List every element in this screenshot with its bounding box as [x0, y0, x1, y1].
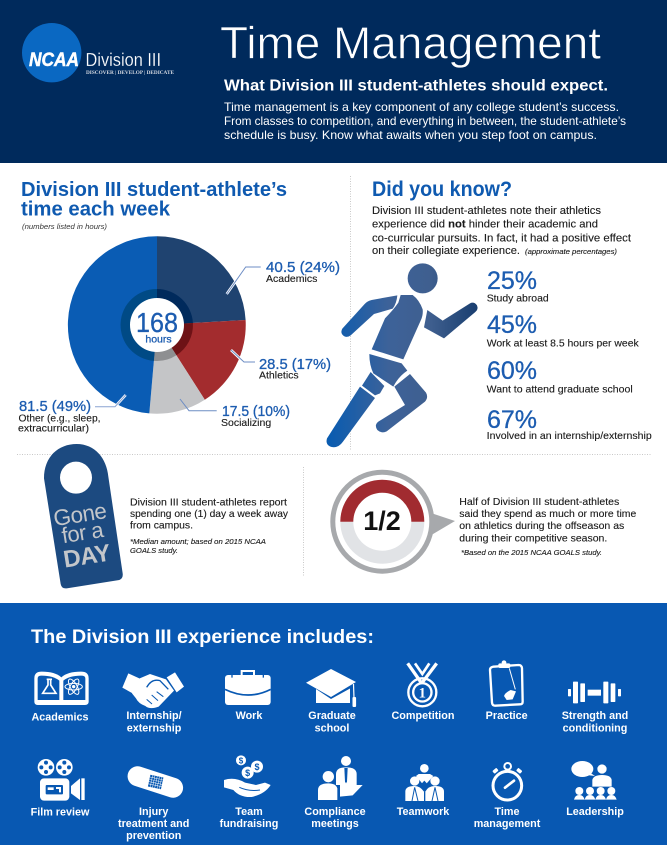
icon: fundraising hand [224, 755, 271, 797]
stat: study abroad: 25% [487, 267, 537, 295]
stat: graduate school [487, 357, 633, 396]
one half text [459, 496, 636, 557]
icon: medal [408, 663, 437, 706]
gone for a day text: GOALS study. [130, 548, 178, 555]
label: other [18, 398, 100, 434]
label: academics: Academics [31, 712, 89, 724]
label: other: extracurricular) [18, 422, 89, 434]
intro text [224, 100, 626, 142]
did you know text: experience did not hinder their academic and [372, 218, 598, 230]
stat: study abroad [487, 267, 549, 304]
stat: graduate school: Want to attend graduate school [487, 384, 633, 396]
panel: experience [0, 603, 667, 845]
label: time management [474, 806, 541, 830]
label: academics [266, 259, 340, 285]
centre total: 168 [136, 307, 178, 338]
intro text: schedule is busy. Know what awaits when you step foot on campus. [224, 128, 597, 142]
label: graduate school [308, 710, 356, 734]
icon: film camera [38, 759, 85, 801]
stat: internship [487, 406, 652, 442]
dotted dividers [17, 176, 652, 576]
label: other: 81.5 (49%) [19, 398, 91, 415]
label: socializing [221, 403, 290, 429]
label: socializing: Socializing [221, 417, 271, 429]
heading: did you know: Did you know? [372, 178, 512, 201]
label: fundraising: fundraising [220, 818, 278, 830]
stat: work [487, 311, 639, 350]
stat: work: 45% [487, 311, 537, 339]
gone for a day text: Division III student-athletes report [130, 496, 287, 508]
stat: internship: Involved in an internship/externship [487, 430, 652, 442]
label: practice: Practice [486, 710, 528, 722]
label: compliance: meetings [311, 818, 359, 830]
leader lines [95, 267, 261, 411]
icon: door hanger [44, 444, 123, 588]
label: strength: Strength and [562, 710, 628, 722]
NCAA Division III logo: DISCOVER | DEVELOP | DEDICATE [86, 71, 174, 76]
did you know text: co-curricular pursuits. In fact, it had a positive effect [372, 232, 631, 244]
label: athletics: Athletics [259, 370, 299, 382]
icon: clipboard with whistle [490, 660, 523, 706]
label: time management: Time [494, 806, 520, 818]
one half text: during their competitive season. [459, 532, 607, 544]
label: athletics: 28.5 (17%) [259, 356, 331, 373]
label: time management: management [474, 818, 541, 830]
label: internship: Internship/ [126, 710, 182, 722]
title: Time Management [220, 18, 601, 68]
did you know text [372, 205, 631, 257]
label: teamwork: Teamwork [397, 806, 450, 818]
heading: weekly time: Division III student-athlete’s [21, 178, 287, 201]
icon: handshake [122, 672, 184, 708]
icon: academics [34, 672, 89, 705]
intro text: From classes to competition, and everything in between, the student-athlete’s [224, 114, 626, 128]
stat: study abroad: Study abroad [487, 292, 549, 304]
icon: runner [327, 263, 478, 447]
intro text: Time management is a key component of any college student’s success. [224, 100, 619, 114]
gone for a day text: from campus. [130, 520, 193, 532]
icon: leadership [571, 761, 617, 800]
icon: door hanger: for a [60, 517, 106, 548]
label: competition: Competition [392, 710, 454, 722]
NCAA Division III logo: Division III [86, 49, 161, 70]
label: socializing: 17.5 (10%) [222, 403, 290, 420]
header band [0, 0, 667, 163]
heading: weekly time [21, 178, 287, 221]
label: injury: prevention [126, 830, 181, 842]
stat: graduate school: 60% [487, 357, 537, 385]
label: fundraising [220, 806, 278, 830]
subtitle: What Division III student-athletes should expect. [224, 78, 608, 95]
label: strength: conditioning [563, 722, 627, 734]
one half text: said they spend as much or more time [459, 508, 636, 520]
label: strength [562, 710, 628, 734]
one half graphic: 1/2 [363, 506, 401, 536]
did you know text: on their collegiate experience. [372, 245, 520, 257]
gone for a day text: *Median amount; based on 2015 NCAA [130, 539, 266, 546]
icon: stopwatch [492, 763, 522, 800]
stat: internship: 67% [487, 406, 537, 434]
heading: weekly time: time each week [21, 198, 171, 221]
NCAA Division III logo [22, 23, 174, 82]
label: injury: Injury [139, 806, 168, 818]
icon: medal: 1 [419, 686, 426, 702]
label: injury: treatment and [118, 818, 189, 830]
did you know text: (approximate percentages) [525, 247, 617, 256]
icon: graduation cap [306, 669, 356, 707]
icon: door hanger: Gone [52, 498, 108, 531]
label: internship: externship [127, 722, 182, 734]
icon: door hanger: DAY [62, 540, 113, 574]
one half graphic [333, 472, 455, 571]
label: academics: Academics [266, 273, 317, 285]
centre total: hours [145, 334, 172, 346]
icon: fundraising hand: $ [254, 762, 259, 772]
icon: teamwork [405, 764, 444, 801]
one half text: Half of Division III student-athletes [459, 496, 619, 508]
icon: fundraising hand: $ [245, 768, 250, 778]
icon: bandage [125, 764, 186, 800]
one half text: *Based on the 2015 NCAA GOALS study. [461, 550, 602, 557]
experience heading: The Division III experience includes: [31, 626, 374, 648]
label: fundraising: Team [235, 806, 263, 818]
label: athletics [259, 356, 331, 382]
label: leadership: Leadership [566, 806, 624, 818]
chart note: (numbers listed in hours) [22, 224, 107, 231]
label: compliance [304, 806, 366, 830]
icon: compliance meeting [318, 756, 363, 800]
label: work: Work [236, 710, 263, 722]
icon: fundraising hand: $ [239, 756, 244, 765]
label: compliance: Compliance [304, 806, 366, 818]
label: internship [126, 710, 182, 734]
label: film review: Film review [31, 807, 90, 819]
label: graduate school: school [315, 722, 349, 734]
label: injury [118, 806, 189, 842]
one half text: on athletics during the offseason as [459, 520, 624, 532]
gone for a day text: spending one (1) day a week away [130, 508, 289, 520]
did you know text: Division III student-athletes note their athletics [372, 205, 601, 217]
icon: briefcase [225, 671, 271, 705]
gone for a day text [130, 496, 289, 555]
label: other: Other (e.g., sleep, [18, 412, 100, 424]
label: academics: 40.5 (24%) [266, 259, 340, 276]
pie chart [68, 236, 246, 414]
label: graduate school: Graduate [308, 710, 356, 722]
icon: dumbbell [568, 682, 621, 703]
stat: work: Work at least 8.5 hours per week [487, 338, 639, 350]
NCAA Division III logo: NCAA [29, 50, 79, 71]
